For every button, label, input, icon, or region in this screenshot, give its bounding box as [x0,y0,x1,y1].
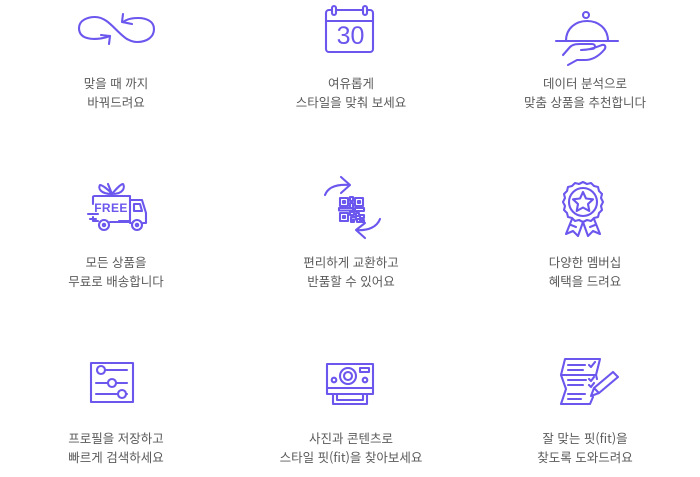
text: easy returns: 반품할 수 있어요 [307,271,395,290]
text: membership benefits: 혜택을 드려요 [549,271,621,290]
text: exchange until fit: 맞을 때 까지 [84,73,148,92]
text: membership benefits [549,252,621,290]
text: free delivery [68,252,164,290]
text: free delivery: 모든 상품을 [85,252,146,271]
text: exchange until fit: 바꿔드려요 [87,92,145,111]
text: data recommendation: 맞춤 상품을 추천합니다 [524,92,646,111]
text: data recommendation [524,73,646,111]
text: data recommendation: 데이터 분석으로 [543,73,627,92]
icon: free delivery truck [88,184,146,230]
text: save profile: 프로필을 저장하고 [68,428,164,447]
icon: calendar: 30 [337,22,364,50]
text: save profile [68,428,164,466]
text: save profile: 빠르게 검색하세요 [68,447,164,466]
icon: QR code exchange arrows [325,177,380,238]
text: fit finding help [537,428,633,466]
text: membership benefits: 다양한 멤버십 [549,252,621,271]
text: easy returns: 편리하게 교환하고 [303,252,399,271]
text: free delivery: 무료로 배송합니다 [68,271,164,290]
text: photos and content [280,428,422,466]
text: relaxed styling: 여유롭게 [328,73,374,92]
text: easy returns [303,252,399,290]
icon: infinity arrows [79,14,154,44]
icon: medal with star [563,182,603,236]
text: fit finding help: 찾도록 도와드려요 [537,447,633,466]
icon: free delivery truck: FREE [94,201,128,215]
text: relaxed styling: 스타일을 맞춰 보세요 [296,92,406,111]
text: photos and content: 스타일 핏(fit)을 찾아보세요 [280,447,422,466]
text: photos and content: 사진과 콘텐츠로 [309,428,393,447]
text: exchange until fit [84,73,148,111]
icon: calendar [326,6,373,52]
text: relaxed styling [296,73,406,111]
icon: serving cloche and hand [556,12,618,65]
icon: checklist and pen [561,359,618,404]
text: fit finding help: 잘 맞는 핏(fit)을 [542,428,628,447]
icon: profile sliders [91,363,133,402]
icon: instant camera [327,364,373,404]
